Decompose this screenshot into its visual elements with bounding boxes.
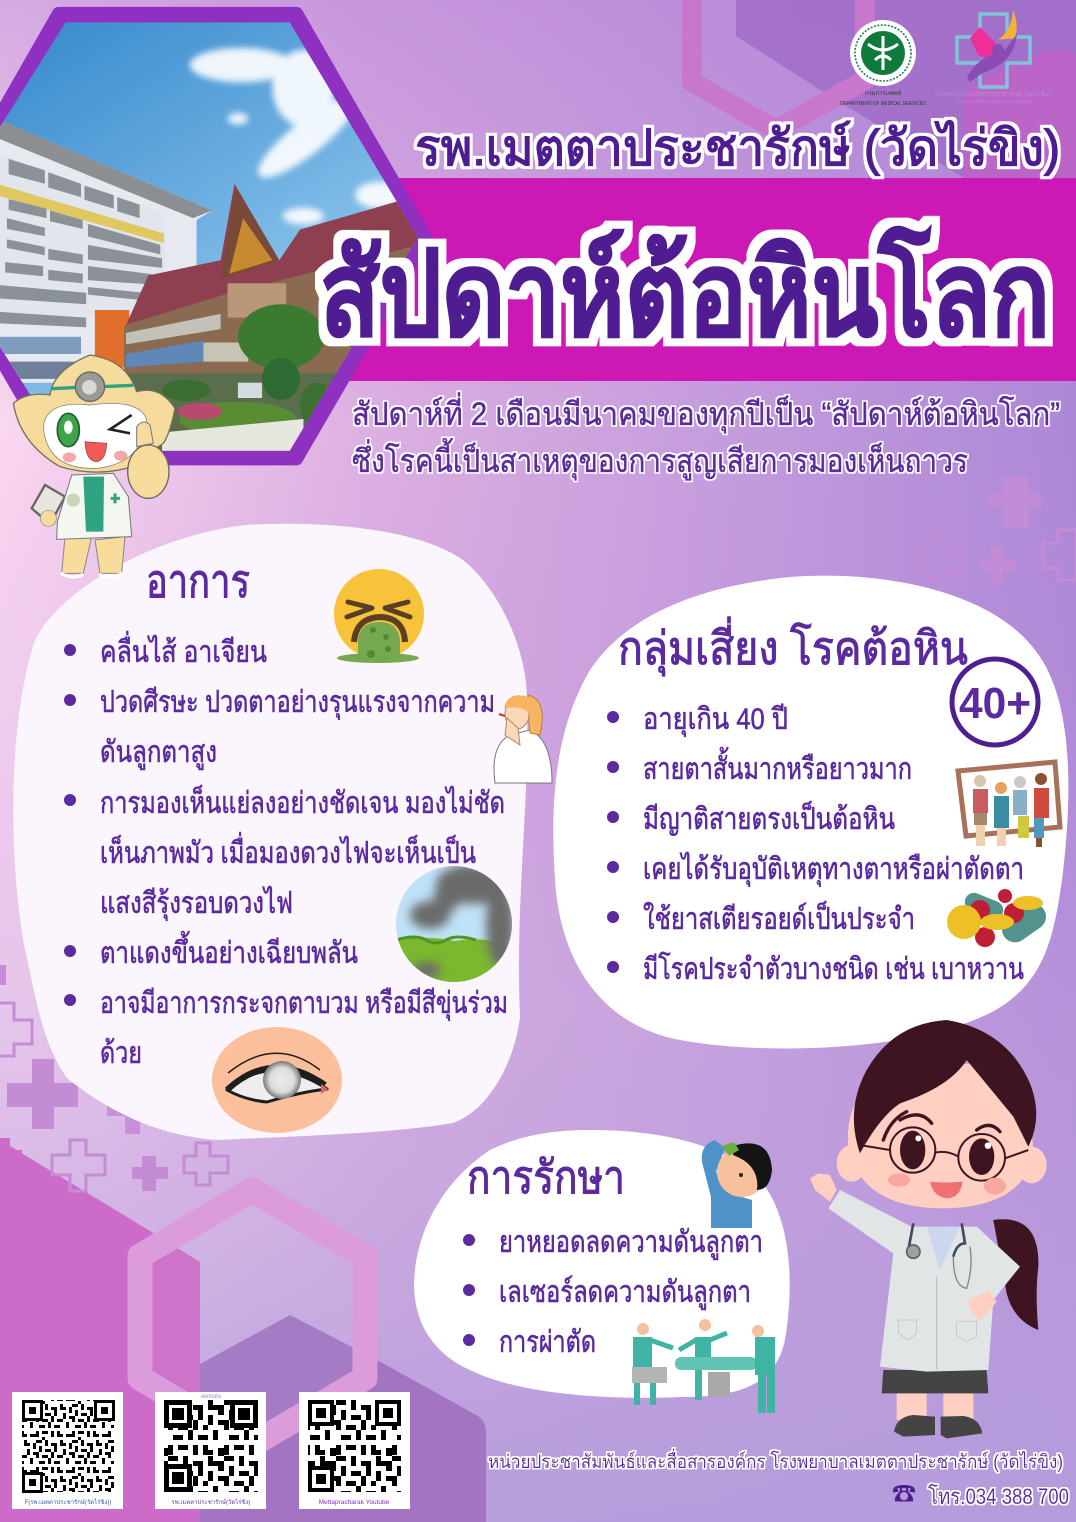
qr code: website	[155, 1392, 266, 1509]
qr code: youtube: Mettapracharak Youtube	[319, 1499, 390, 1506]
symptoms list: การมองเห็นแย่ลงอย่างชัดเจน มองไม่ชัด	[100, 784, 505, 820]
icon: boy using eye drops	[702, 1140, 772, 1228]
symptoms list: ด้วย	[100, 1037, 142, 1070]
icon: family picture frame	[958, 762, 1060, 847]
logo: hospital cross and lotus	[935, 10, 1051, 105]
heading: risk group: กลุ่มเสี่ยง โรคต้อหิน	[618, 616, 968, 677]
treatment list: การผ่าตัด	[499, 1326, 596, 1359]
icon: nauseated face	[334, 569, 424, 663]
trees and gardens	[238, 304, 324, 369]
heading: symptoms: อาการ	[146, 555, 250, 607]
icon: pills	[947, 889, 1051, 947]
logo: ministry of public health seal	[840, 20, 926, 107]
illustration: doctor girl	[810, 1020, 1047, 1438]
decorative crosses	[0, 477, 1076, 1191]
risk list: อายุเกิน 40 ปี	[643, 703, 788, 738]
icon: woman with eye pain	[494, 695, 552, 783]
logo: ministry of public health seal: กรมการแพทย์	[865, 89, 901, 97]
symptoms list: ดันลูกตาสูง	[100, 736, 217, 770]
white hospital tower	[0, 119, 212, 383]
treatment list: ยาหยอดลดความดันลูกตา	[499, 1226, 763, 1260]
qr code: website: รพ.เมตตาประชารักษ์(วัดไร่ขิง)	[171, 1498, 251, 1506]
qr code: facebook: F(รพ.เมตตาประชารักษ์(วัดไร่ขิง))	[25, 1498, 111, 1506]
symptoms list: แสงสีรุ้งรอบดวงไฟ	[100, 885, 293, 922]
intro text	[352, 392, 1060, 481]
symptoms list: ปวดศีรษะ ปวดตาอย่างรุนแรงจากความ	[100, 686, 495, 721]
icon: blurred vision circle	[395, 864, 514, 985]
risk list: สายตาสั้นมากหรือยาวมาก	[643, 747, 912, 786]
panel: symptoms blob	[13, 524, 527, 1140]
heading: treatment: การรักษา	[467, 1151, 625, 1203]
footer: phone number	[892, 1481, 1069, 1509]
symptoms list	[64, 631, 508, 1070]
logo: ministry of public health seal: DEPARTMENT OF MEDICAL SERVICES	[840, 101, 926, 107]
qr code: facebook	[12, 1392, 123, 1509]
logo: hospital cross and lotus: กรมการแพทย์ กระทรวงสาธารณสุข	[955, 98, 1031, 105]
photo: hospital in hexagon frame	[0, 15, 425, 458]
treatment list: เลเซอร์ลดความดันลูกตา	[499, 1275, 751, 1310]
intro text: ซึ่งโรคนี้เป็นสาเหตุของการสูญเสียการมองเห็นถาวร	[352, 438, 968, 481]
risk list: ใช้ยาสเตียรอยด์เป็นประจำ	[643, 900, 915, 936]
symptoms list: ตาแดงขึ้นอย่างเฉียบพลัน	[100, 931, 358, 970]
symptoms list: อาจมีอาการกระจกตาบวม หรือมีสีขุ่นร่วม	[100, 987, 508, 1022]
risk list	[607, 703, 1024, 986]
logo: hospital cross and lotus: โรงพยาบาลเมตตาประชารักษ์ (วัดไร่ขิง)	[935, 90, 1051, 98]
qr code: website: website	[200, 1394, 222, 1400]
panel: risk group blob	[553, 576, 1068, 1048]
traditional Thai building	[124, 184, 419, 337]
symptoms list: เห็นภาพมัว เมื่อมองดวงไฟจะเห็นเป็น	[100, 832, 476, 870]
footer: phone number: ☎	[892, 1481, 916, 1508]
panel: treatment blob	[414, 1130, 790, 1398]
mascot: doctor character	[13, 355, 175, 577]
qr code: youtube	[299, 1392, 410, 1509]
treatment list	[463, 1226, 763, 1359]
icon: age 40 plus badge: 40+	[959, 679, 1031, 728]
heading: hospital name: รพ.เมตตาประชารักษ์ (วัดไร่ขิง)	[415, 120, 1060, 176]
symptoms list: คลื่นไส้ อาเจียน	[100, 631, 267, 669]
risk list: มีญาติสายตรงเป็นต้อหิน	[643, 800, 895, 836]
icon: surgery team	[632, 1319, 775, 1413]
icon: age 40 plus badge	[952, 659, 1038, 745]
banner: magenta title band	[340, 178, 1076, 381]
icon: cataract eye	[212, 1027, 342, 1133]
